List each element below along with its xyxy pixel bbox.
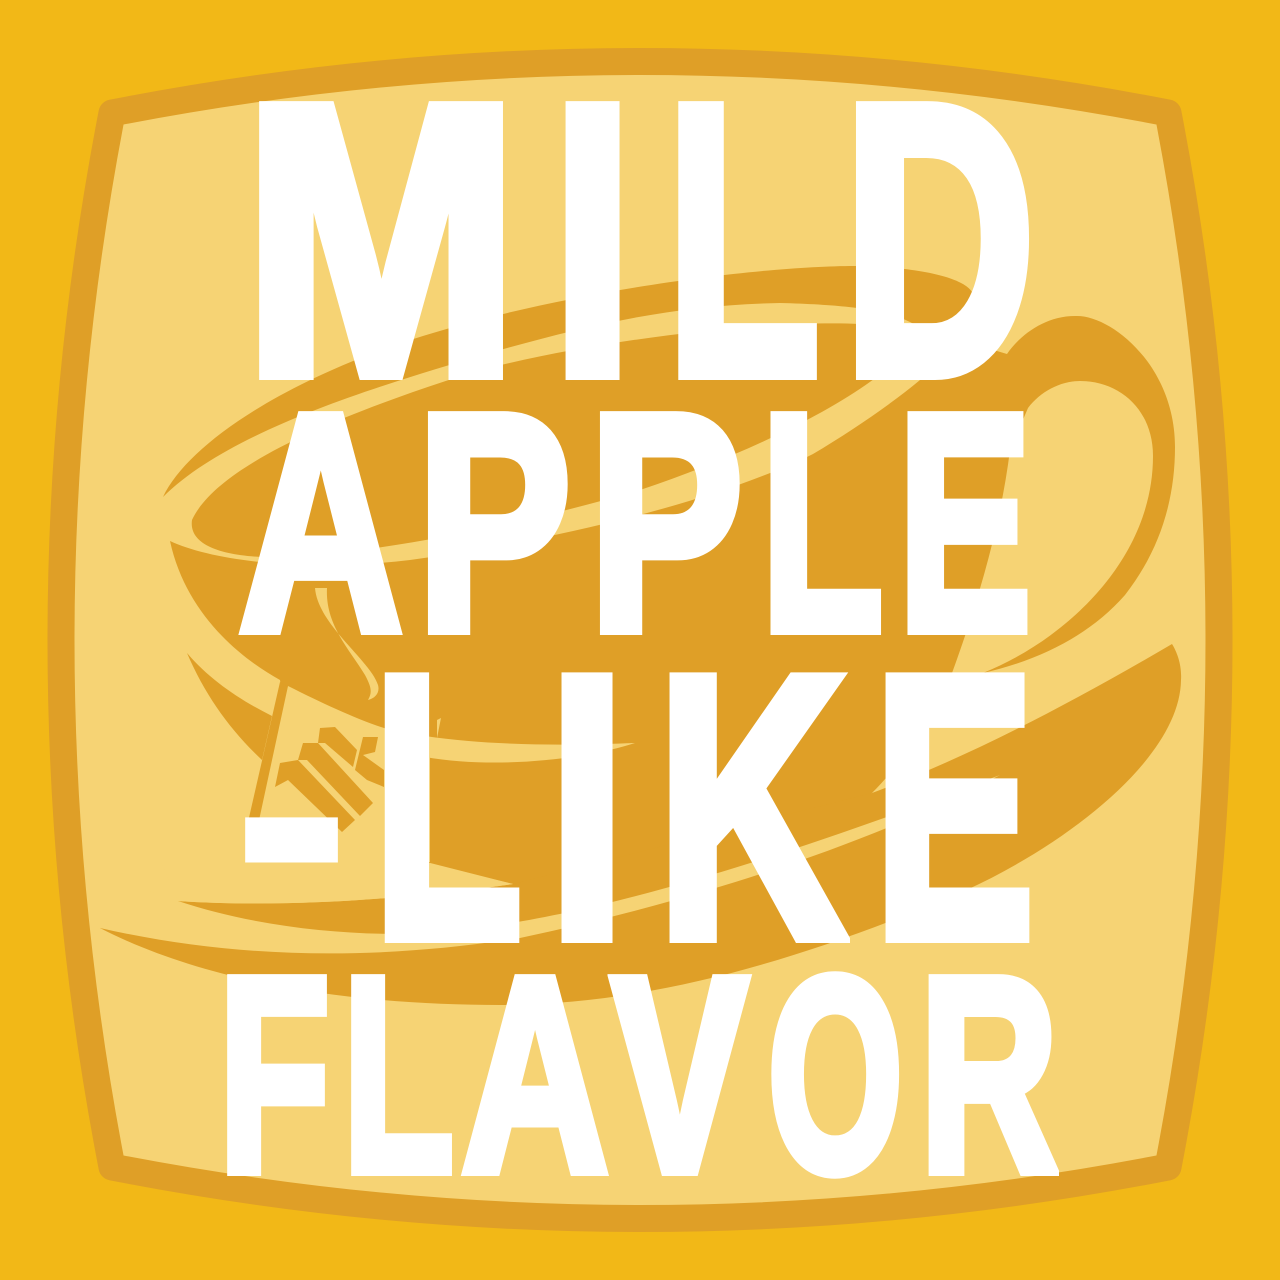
cup shadow crescent	[187, 653, 272, 760]
title line: APPLE: P	[417, 351, 571, 695]
saucer	[100, 644, 1181, 1005]
title line: -LIKE: -	[234, 628, 348, 995]
cup rim	[163, 266, 972, 497]
title line: MILD: L	[666, 24, 820, 455]
saucer highlight band	[100, 775, 1000, 953]
title line: APPLE: P	[589, 351, 743, 695]
title line: MILD: M	[243, 24, 519, 455]
title line: FLAVOR	[219, 921, 1059, 1229]
cup bowl and handle	[170, 316, 1175, 900]
icon: teacup on saucer	[100, 266, 1181, 1005]
title line: -LIKE: E	[874, 599, 1034, 1016]
title line: FLAVOR: R	[920, 921, 1058, 1229]
title line: FLAVOR: A	[462, 921, 608, 1229]
tea bag string	[248, 682, 288, 822]
light crescent on bowl	[425, 736, 635, 763]
title	[219, 24, 1059, 1229]
title line: FLAVOR: O	[768, 921, 902, 1229]
title line: -LIKE: K	[657, 599, 845, 1016]
title line: MILD	[243, 24, 1035, 455]
title line: FLAVOR: L	[343, 921, 454, 1229]
title line: FLAVOR: V	[612, 921, 748, 1229]
title line: -LIKE: L	[373, 599, 522, 1016]
title line: MILD: D	[843, 24, 1035, 455]
title line: -LIKE	[234, 599, 1034, 1016]
title line: APPLE: L	[761, 351, 883, 695]
steam wisp	[315, 588, 379, 700]
tea bag tag	[258, 686, 430, 862]
title line: -LIKE: I	[548, 599, 626, 1016]
tag emblem	[275, 727, 384, 832]
title line: APPLE: E	[898, 351, 1031, 695]
title line: FLAVOR: F	[219, 921, 330, 1229]
small tag tick	[437, 718, 441, 738]
tea surface	[192, 323, 915, 557]
title line: APPLE: A	[239, 351, 402, 695]
title line: MILD: I	[550, 24, 634, 455]
title line: APPLE	[238, 351, 1031, 695]
lower wedge highlight	[160, 845, 513, 904]
